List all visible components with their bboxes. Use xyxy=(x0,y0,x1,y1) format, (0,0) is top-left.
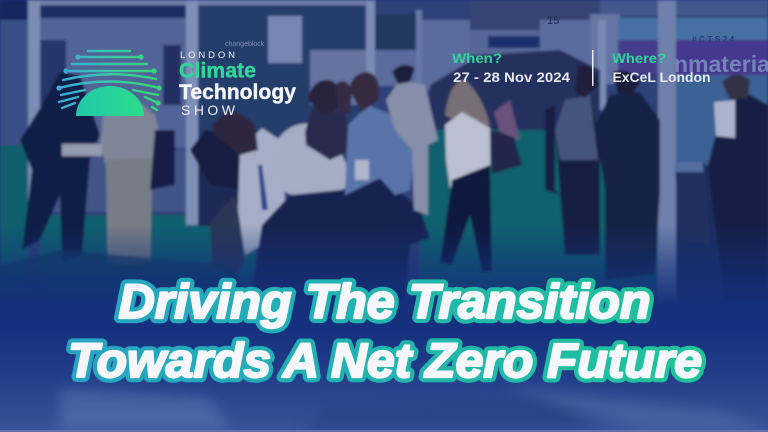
event info: where: ExCeL London xyxy=(612,69,710,85)
bottom fade overlay xyxy=(0,225,768,432)
photo tint xyxy=(0,0,768,300)
logo: Technology xyxy=(179,80,296,104)
event info: when: 27 - 28 Nov 2024 xyxy=(453,69,570,85)
event info: when: When? xyxy=(452,50,502,66)
event info: where: Where? xyxy=(612,50,666,66)
icon: dome xyxy=(76,86,144,116)
photo signage: nmateria xyxy=(674,51,768,77)
photo signage: 15 xyxy=(547,15,559,27)
photo signage: changeblock xyxy=(225,41,265,48)
title: Towards A Net Zero Future xyxy=(68,335,702,388)
title: Towards A Net Zero Future xyxy=(68,335,702,388)
floor darkening xyxy=(0,250,250,300)
person: man with backpack xyxy=(595,92,660,280)
earth texture xyxy=(60,385,768,430)
person: man in dark suit xyxy=(20,72,100,262)
person: bending man xyxy=(238,128,285,255)
photo signage: #CTS24 xyxy=(692,34,736,44)
person: man in beige xyxy=(100,90,160,265)
stall walls xyxy=(0,20,28,145)
logo: Climate xyxy=(179,60,256,82)
person: man in suit right xyxy=(708,92,768,300)
divider xyxy=(592,50,594,86)
floor xyxy=(0,145,28,295)
icon: globe with arcs xyxy=(56,51,162,110)
logo text: LONDON xyxy=(180,50,235,61)
person: blonde with dark top xyxy=(272,124,352,198)
ceiling xyxy=(0,0,30,20)
title xyxy=(68,276,702,388)
person: woman in white xyxy=(445,80,490,130)
title: Driving The Transition xyxy=(118,276,650,329)
title: Driving The Transition xyxy=(118,276,650,329)
photo signage xyxy=(225,15,768,77)
person: group xyxy=(305,108,352,160)
logo xyxy=(56,50,296,118)
columns xyxy=(28,0,40,218)
person: man in grey jacket xyxy=(555,95,600,255)
aisle crowd xyxy=(430,50,600,130)
event info: when xyxy=(452,50,570,85)
person: man in beige jacket xyxy=(386,80,438,215)
logo: SHOW xyxy=(181,102,236,118)
event info: where xyxy=(612,50,710,85)
bag / dark figure xyxy=(190,130,245,190)
